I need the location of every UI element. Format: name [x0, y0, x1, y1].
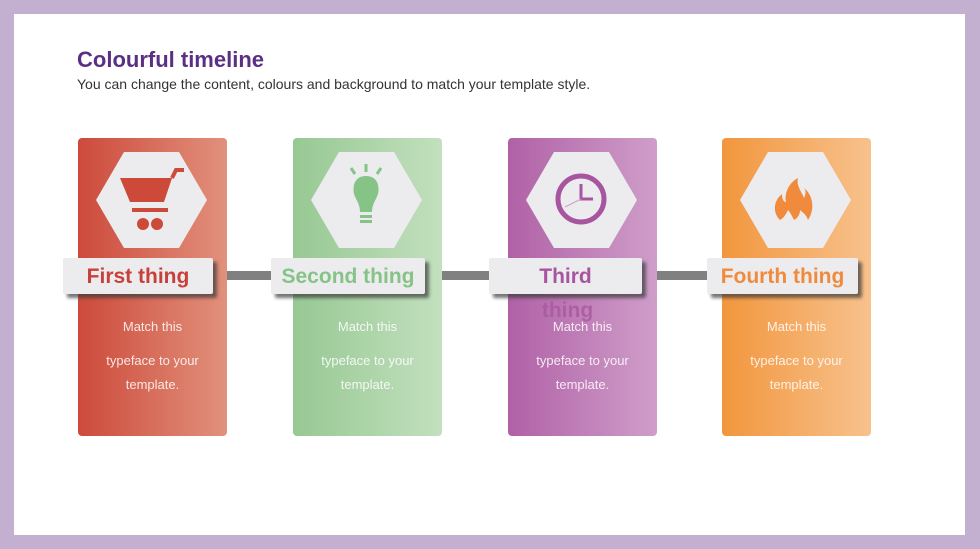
text: template. — [126, 377, 179, 392]
label 3 — [489, 258, 642, 294]
label 1: First thing — [87, 265, 189, 288]
label 2: Second thing — [282, 265, 414, 288]
connector 3 — [642, 271, 709, 280]
card 2: Match this — [338, 319, 397, 334]
card 2 — [293, 138, 442, 436]
card 3: Match this — [553, 319, 612, 334]
icon: clock — [526, 152, 637, 248]
card 4: typeface to your — [750, 353, 843, 368]
card 2: typeface to your — [321, 353, 414, 368]
icon: cart — [96, 152, 207, 248]
icon: bulb — [311, 152, 422, 248]
subtitle: You can change the content, colours and background to match your template style. — [77, 76, 590, 92]
label 3: Third — [539, 265, 592, 288]
label 1 — [63, 258, 213, 294]
card 2: template. — [341, 377, 394, 392]
icon: fire — [740, 152, 851, 248]
card 3: typeface to your — [536, 353, 629, 368]
text: typeface to your — [106, 353, 199, 368]
label 4 — [707, 258, 858, 294]
card 4: template. — [770, 377, 823, 392]
card 3: template. — [556, 377, 609, 392]
connector 1 — [213, 271, 273, 280]
card 1 — [78, 138, 227, 436]
card 4: Match this — [767, 319, 826, 334]
text: Match this — [123, 319, 182, 334]
card 4 — [722, 138, 871, 436]
text: thing — [542, 299, 593, 322]
card 3 — [508, 138, 657, 436]
title: Colourful timeline — [77, 47, 264, 72]
text — [106, 319, 199, 392]
label 2 — [271, 258, 425, 294]
label 4: Fourth thing — [721, 265, 844, 288]
connector 2 — [425, 271, 491, 280]
